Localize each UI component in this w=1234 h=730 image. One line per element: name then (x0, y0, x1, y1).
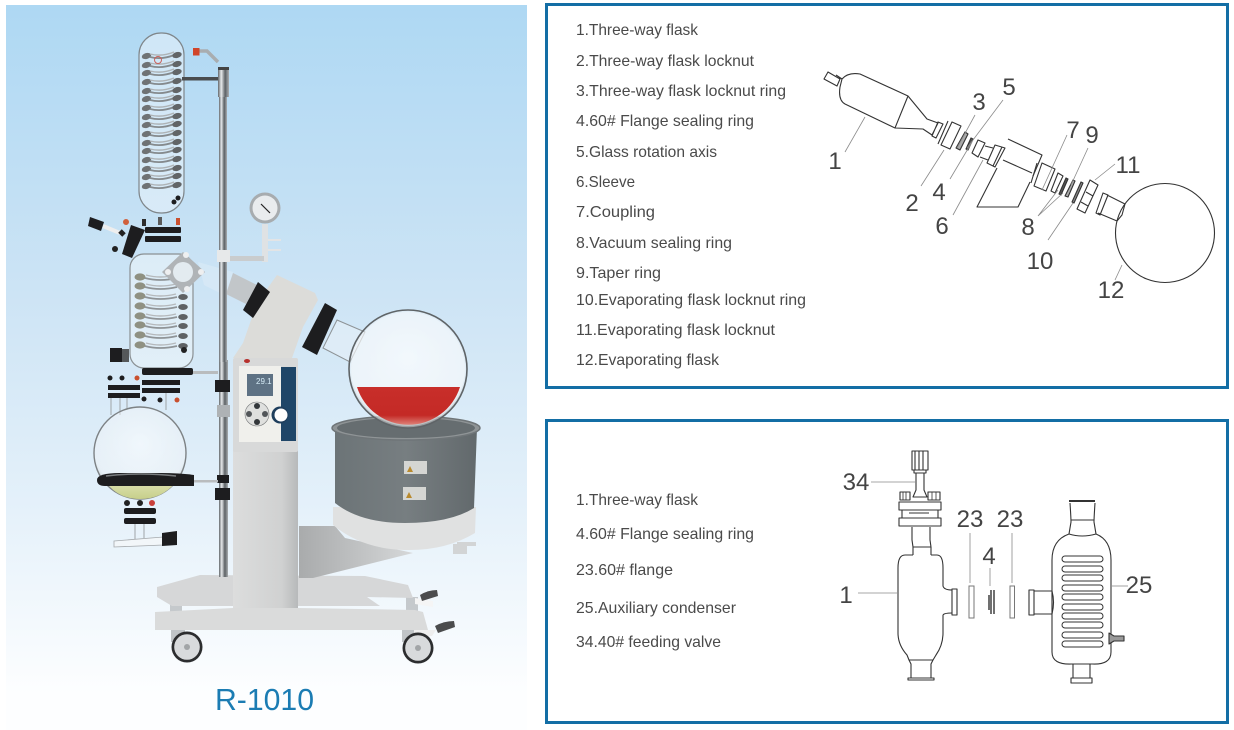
blue strip (281, 367, 296, 441)
brake pedals (420, 590, 455, 633)
part numbers: 7 (1066, 117, 1080, 144)
sealing ring 4 (989, 590, 994, 614)
right black ring (302, 303, 337, 355)
support arm (182, 77, 218, 80)
bath support arm (299, 526, 413, 578)
cooling coil (134, 273, 188, 349)
upper lifting rod (218, 67, 229, 362)
model name: R-1010 (215, 683, 314, 717)
cooling coil (1062, 556, 1103, 647)
part 10: flask locknut ring (1072, 182, 1083, 203)
auxiliary condenser diagram (1029, 501, 1124, 683)
part numbers: 23 (957, 506, 983, 533)
sight glass flange (162, 252, 205, 293)
parts list: 7.Coupling (576, 204, 655, 221)
part 2: locknut (938, 121, 961, 149)
clamp rings (145, 227, 181, 242)
keypad (245, 402, 269, 426)
rear base plate (157, 575, 413, 606)
elbow tube (193, 48, 218, 62)
panel: product photo (6, 5, 527, 730)
part numbers: 34 (843, 469, 869, 496)
parts list: 1.Three-way flask (576, 492, 699, 509)
coolant fittings (172, 196, 180, 204)
parts list: 4.60# Flange sealing ring (576, 113, 754, 130)
parts list: 3.Three-way flask locknut ring (576, 83, 786, 100)
receiving flask (94, 407, 218, 547)
part numbers: 1 (839, 582, 853, 609)
upper clamp assembly (88, 217, 181, 258)
black collar and support arm (142, 368, 218, 375)
parts list: 6.Sleeve (576, 174, 635, 191)
parts list (576, 22, 806, 369)
clamp bolts (123, 217, 180, 226)
side port (1029, 590, 1054, 615)
flange 23 left (969, 586, 974, 618)
flask support ring (97, 473, 218, 486)
middle condenser (130, 252, 205, 368)
parts list: 10.Evaporating flask locknut ring (576, 292, 806, 309)
parts list: 2.Three-way flask locknut (576, 53, 755, 70)
part 3: locknut ring (956, 132, 968, 150)
bottom joint (908, 660, 934, 680)
exploded view diagram (824, 72, 1214, 304)
parts list: 8.Vacuum sealing ring (576, 235, 732, 252)
parts list: 23.60# flange (576, 562, 673, 579)
parts list: 25.Auxiliary condenser (576, 600, 737, 617)
vessel body (1052, 534, 1111, 664)
clamp bars right (142, 380, 180, 402)
lifting rod lower section (219, 360, 228, 577)
drain nozzle (1109, 633, 1124, 644)
parts list (576, 492, 754, 651)
part 5: glass rotation axis (972, 140, 993, 160)
front left caster (171, 630, 202, 662)
part numbers: 1 (828, 148, 842, 175)
main column (233, 450, 298, 608)
vacuum gauge (217, 192, 281, 262)
flask neck (912, 527, 931, 547)
parts list: 34.40# feeding valve (576, 634, 721, 651)
feeding valve diagram (898, 451, 957, 680)
bottom joint (1071, 664, 1092, 683)
rear casters (170, 597, 433, 615)
warning label (403, 487, 426, 500)
part 11: flask locknut (1077, 180, 1098, 213)
black ring left (243, 282, 270, 318)
panel: main parts list and exploded view (546, 4, 1228, 388)
silver sleeve (226, 273, 257, 304)
digital display: 29.1 (256, 377, 272, 386)
part numbers: 10 (1027, 248, 1053, 275)
part numbers: 6 (935, 213, 949, 240)
part numbers: 23 (997, 506, 1023, 533)
motor head (198, 262, 467, 428)
glass connector tube (198, 262, 233, 296)
part numbers: 25 (1126, 572, 1152, 599)
clamp assembly (899, 492, 941, 526)
valve knob (912, 451, 928, 473)
part numbers: 12 (1098, 277, 1124, 304)
red marker (154, 56, 162, 64)
yellow liquid (106, 480, 176, 499)
clamp bars left (108, 376, 140, 398)
part numbers: 2 (905, 190, 919, 217)
base and column of rotary evaporator (155, 360, 455, 664)
part 1 flask body (898, 547, 952, 660)
control panel (233, 358, 298, 452)
panel: auxiliary condenser parts list and diagram (546, 420, 1228, 722)
flask neck (323, 320, 365, 362)
part numbers: 4 (982, 543, 996, 570)
bath rim (332, 416, 480, 440)
leader lines (845, 100, 1122, 280)
part numbers: 8 (1021, 214, 1035, 241)
housing (977, 139, 1042, 207)
parts list: 12.Evaporating flask (576, 352, 720, 369)
part 7: coupling (1031, 163, 1055, 191)
lower clamp assembly (108, 348, 218, 415)
bath base (333, 507, 476, 550)
side handle (88, 217, 124, 252)
logo (244, 359, 250, 363)
rod clamps (215, 380, 230, 500)
bath adjuster foot (453, 542, 476, 554)
motor housing and neck (233, 275, 318, 358)
parts list: 1.Three-way flask (576, 22, 699, 39)
drain tube (114, 524, 177, 547)
condensate valve clamps (124, 500, 156, 524)
part 6: sleeve (987, 145, 1005, 167)
part numbers (828, 74, 1140, 304)
water bath (332, 416, 480, 554)
top joint (1069, 500, 1095, 502)
part 12: evaporating flask (1096, 193, 1125, 221)
part 8: sealing rings (1051, 173, 1063, 193)
part numbers: 11 (1116, 152, 1140, 179)
top caps (110, 348, 129, 362)
part 9: taper ring (1065, 180, 1075, 197)
parts list: 11.Evaporating flask locknut (576, 322, 776, 339)
cooling coil (141, 51, 182, 190)
part numbers: 5 (1002, 74, 1016, 101)
side clamp (122, 225, 145, 258)
parts list: 5.Glass rotation axis (576, 144, 717, 161)
part numbers (839, 469, 1152, 609)
leader lines (858, 482, 1128, 593)
front base plate (155, 608, 428, 630)
bath body (335, 428, 477, 523)
flange and ring parts (969, 586, 1014, 618)
parts list: 4.60# Flange sealing ring (576, 526, 754, 543)
warning label (404, 461, 427, 474)
parts list: 9.Taper ring (576, 265, 661, 282)
part numbers: 3 (972, 89, 986, 116)
front right caster (402, 630, 436, 664)
top condenser (139, 33, 218, 213)
side port flange (952, 589, 957, 615)
part numbers: 4 (932, 179, 946, 206)
coolant port (181, 347, 187, 353)
part 1: three-way flask (824, 72, 943, 138)
glass stems (111, 393, 166, 415)
part numbers: 9 (1085, 122, 1099, 149)
valve stem (913, 473, 927, 497)
panel face (239, 366, 281, 442)
part 4: flange ring (966, 138, 973, 150)
flange 23 right (1010, 586, 1014, 618)
evaporating flask (349, 310, 467, 428)
control knob (272, 406, 288, 424)
